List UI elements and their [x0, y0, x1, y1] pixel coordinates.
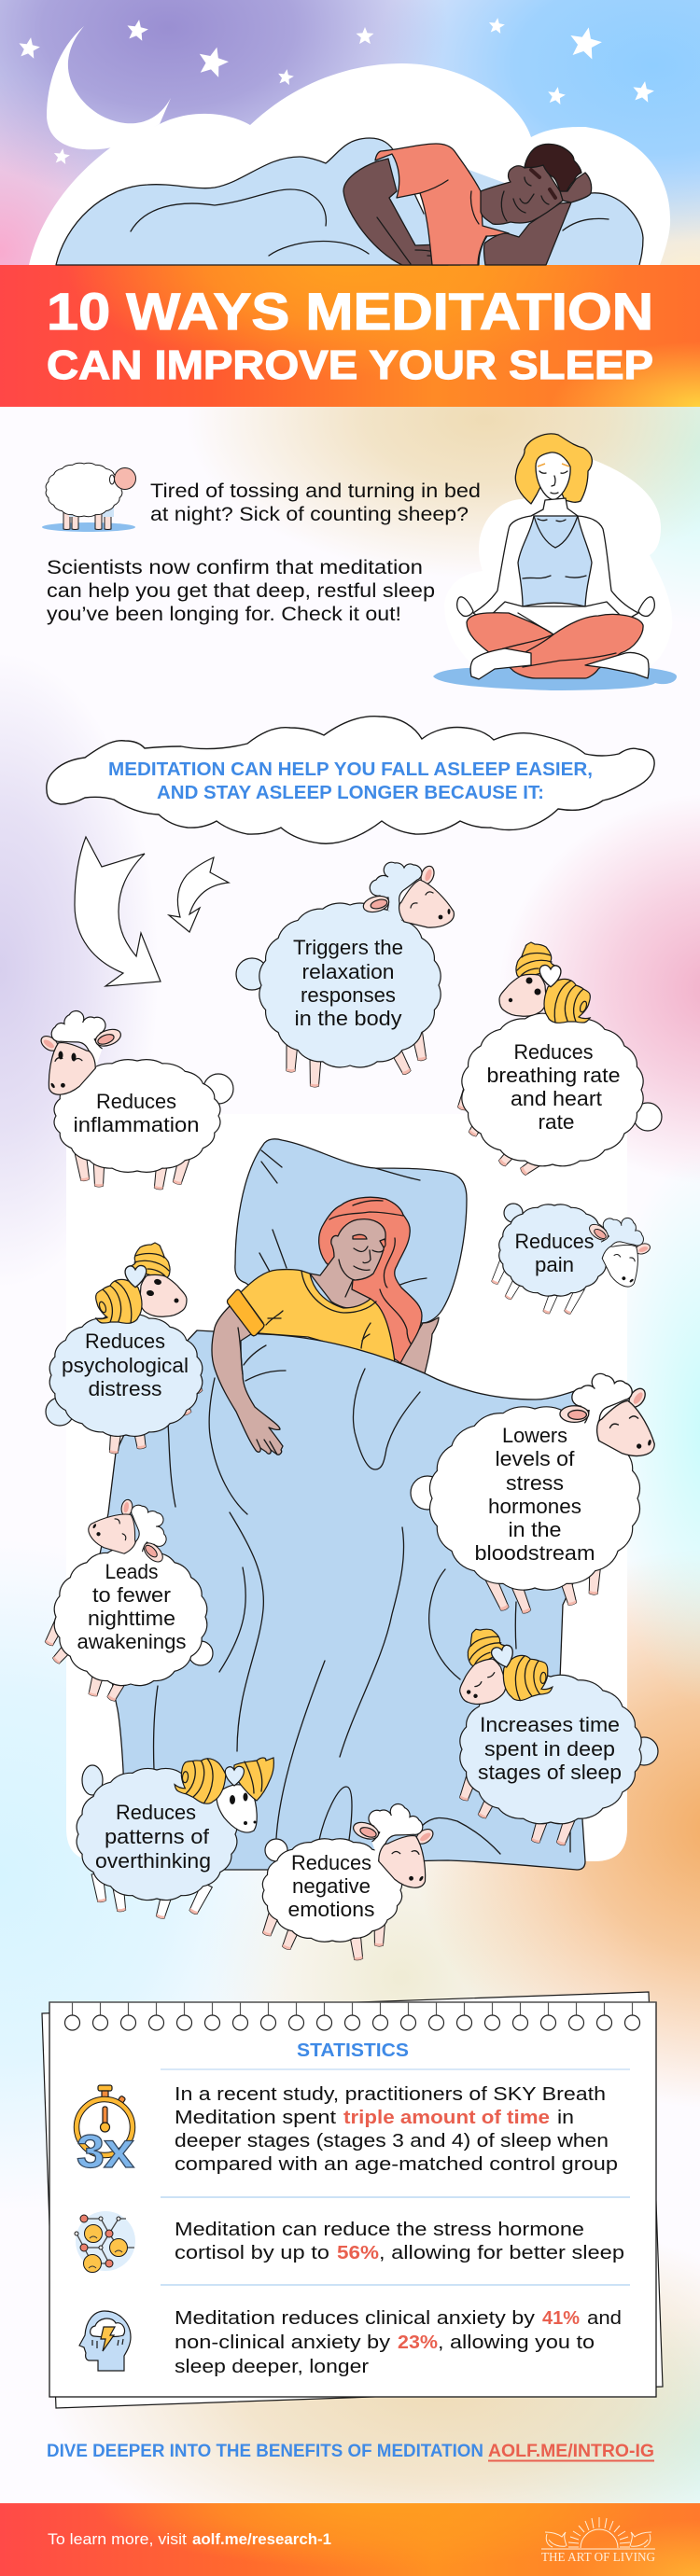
stat text: cortisol: , allowing for better sleep: [379, 2243, 624, 2263]
title banner background: [0, 265, 700, 407]
intro text: scientists confirm: can help you get that deep, restful sleep: [47, 580, 435, 602]
label: patterns of: [105, 1825, 210, 1848]
statistics heading: STATISTICS: [297, 2040, 409, 2061]
sleeping man illustration: [56, 138, 643, 265]
label: [474, 1424, 595, 1565]
stat text: anxiety: sleep deeper, longer: [175, 2357, 369, 2377]
footer text: To learn more, visit: [48, 2530, 187, 2548]
intro text: tired of tossing: [150, 480, 481, 525]
label: stress: [506, 1471, 564, 1495]
stat text: cortisol: Meditation can reduce the stress hormone: [175, 2220, 584, 2240]
stat text: triple amount of time: [175, 2084, 618, 2175]
stat text: triple amount of time: Meditation spent: [175, 2108, 337, 2128]
stat text: triple amount of time: in: [557, 2108, 574, 2128]
cloud heading panel: [47, 717, 654, 843]
stat text: triple amount of time: triple amount of time: [343, 2108, 550, 2128]
icon: stress hormone network: [75, 2211, 135, 2273]
header white cloud: [29, 63, 670, 265]
label: hormones: [488, 1495, 581, 1518]
stat text: triple amount of time: deeper stages (stages 3 and 4) of sleep when: [175, 2131, 609, 2151]
label: bloodstream: [474, 1541, 595, 1565]
label: overthinking: [95, 1849, 211, 1873]
hair: [319, 1197, 422, 1363]
logo: the art of living: THE ART OF LIVING: [541, 2551, 655, 2565]
far arm: [400, 1317, 439, 1373]
curled horns: [172, 1749, 273, 1808]
label: awakenings: [77, 1630, 187, 1653]
stat text: cortisol: cortisol by up to: [175, 2243, 329, 2263]
label: Reduces: [513, 1040, 594, 1064]
blanket wrinkles: [153, 1345, 570, 1854]
footer bar background: [0, 2503, 700, 2576]
label: emotions: [287, 1898, 375, 1921]
label: Increases time: [480, 1713, 620, 1736]
man's neck, raised arm and face: [483, 173, 592, 265]
label: and heart: [511, 1087, 602, 1110]
yellow shirt: [241, 1270, 395, 1362]
man's orange shirt: [375, 144, 509, 265]
blanket: [56, 138, 448, 265]
intro text: tired of tossing: at night? Sick of counting sheep?: [150, 504, 469, 525]
sheep: reduces pain: [490, 1202, 665, 1316]
label: stages of sleep: [478, 1761, 622, 1784]
spiral binding: [49, 2002, 656, 2030]
hair: [515, 434, 592, 504]
white bed panel: [66, 1114, 627, 1861]
man's lower arm: [343, 159, 460, 265]
label: breathing rate: [487, 1064, 620, 1087]
label: pain: [535, 1253, 574, 1276]
label: Lowers: [502, 1424, 567, 1447]
face: [536, 453, 570, 500]
label: Leads: [105, 1560, 159, 1583]
title: 10 WAYS MEDITATION: [47, 282, 653, 341]
label: spent in deep: [484, 1737, 615, 1761]
intro text: scientists confirm: you’ve been longing for. Check it out!: [47, 604, 401, 625]
call to action link line: AOLF.ME/INTRO-IG: [488, 2441, 654, 2461]
label: [62, 1330, 189, 1400]
arrow: small curved: [169, 857, 229, 932]
label: [487, 1040, 620, 1134]
small sheep icon: [42, 463, 136, 532]
sheep: triggers the relaxation responses: [236, 862, 454, 1087]
footer text: aolf.me/research-1: [192, 2530, 331, 2548]
label: [515, 1230, 594, 1276]
sheep: lowers levels of stress hormones: [411, 1366, 669, 1614]
label: distress: [88, 1377, 162, 1400]
label: levels of: [495, 1447, 575, 1470]
label: Reduces: [515, 1230, 594, 1253]
title: [47, 282, 653, 388]
front page: [49, 2002, 656, 2397]
arrow: large curved: [75, 837, 161, 986]
arms and torso: [473, 498, 638, 620]
stat text: anxiety: [175, 2308, 622, 2377]
label: in the body: [295, 1007, 401, 1030]
pillow: [411, 159, 643, 265]
intro text: scientists confirm: [47, 557, 435, 625]
stat text: anxiety: , allowing you to: [438, 2332, 595, 2353]
sheep: reduces breathing rate and heart rate: [456, 942, 662, 1177]
label: relaxation: [302, 960, 394, 983]
stat text: anxiety: Meditation reduces clinical anxiety by: [175, 2308, 535, 2329]
stat text: triple amount of time: In a recent study, practitioners of SKY Breath: [175, 2084, 606, 2105]
cloud heading panel: MEDITATION CAN HELP YOU FALL ASLEEP EASIER,: [108, 759, 593, 780]
label: Reduces: [116, 1801, 196, 1824]
near arm: [212, 1306, 283, 1455]
cloud heading panel: AND STAY ASLEEP LONGER BECAUSE IT:: [157, 783, 544, 803]
title: CAN IMPROVE YOUR SLEEP: [47, 342, 653, 388]
meditating woman illustration: [433, 434, 677, 690]
back page: [42, 1992, 663, 2408]
man's hair: [525, 144, 581, 191]
statistics notebook card: [42, 1992, 663, 2408]
face and neck: [310, 1219, 385, 1308]
sheep: reduces psychological distress: [46, 1243, 204, 1454]
stars: [17, 17, 655, 164]
label: rate: [538, 1110, 575, 1134]
intro text: scientists confirm: Scientists now confirm that meditation: [47, 557, 423, 578]
white blob behind woman: [444, 460, 672, 676]
label: Reduces: [291, 1851, 371, 1874]
stat text: anxiety: non-clinical anxiety by: [175, 2332, 390, 2353]
sheep: leads to fewer nighttime awakenings: [44, 1486, 213, 1703]
icon: stopwatch 3x: 3: [77, 2125, 105, 2178]
footer text: [48, 2530, 331, 2548]
label: psychological: [62, 1354, 189, 1377]
stat text: triple amount of time: compared with an age-matched control group: [175, 2154, 618, 2175]
stat text: cortisol: 56%: [337, 2243, 379, 2263]
stat text: anxiety: and: [587, 2308, 622, 2329]
feet: [470, 648, 649, 679]
logo: the art of living: [541, 2517, 655, 2565]
night sky background: [0, 0, 700, 265]
call to action link line: DIVE DEEPER INTO THE BENEFITS OF MEDITATION: [47, 2441, 483, 2461]
label: in the: [508, 1518, 562, 1541]
icon: stopwatch 3x: [77, 2085, 134, 2179]
sheep: reduces negative emotions: [261, 1789, 454, 1961]
label: [287, 1851, 375, 1921]
sheep: reduces inflammation: [21, 996, 233, 1191]
sleeping woman in bed illustration: [93, 1139, 616, 1870]
mat shadow: [433, 667, 677, 690]
label: [293, 936, 403, 1030]
label: [478, 1713, 622, 1784]
icon: stopwatch 3x: x: [104, 2123, 134, 2179]
icon: head with storm cloud: [79, 2311, 131, 2371]
sleeve cuff: [228, 1289, 264, 1336]
label: negative: [292, 1874, 371, 1898]
pillow: [235, 1139, 467, 1323]
label: Triggers the: [293, 936, 403, 959]
label: nighttime: [88, 1607, 175, 1630]
label: inflammation: [73, 1113, 200, 1136]
label: responses: [301, 983, 396, 1007]
stat text: anxiety: 23%: [398, 2332, 438, 2353]
sheep: increases time in deep sleep: [445, 1614, 658, 1846]
crossed legs: [467, 613, 643, 678]
label: [73, 1090, 200, 1136]
crescent moon: [47, 26, 171, 149]
label: to fewer: [92, 1583, 171, 1607]
label: Reduces: [85, 1330, 165, 1353]
stat text: anxiety: 41%: [542, 2308, 580, 2329]
stat text: cortisol: [175, 2220, 624, 2263]
label: [77, 1560, 187, 1653]
intro text: tired of tossing: Tired of tossing and turning in bed: [150, 480, 481, 502]
sheep: reduces patterns of overthinking: [77, 1749, 273, 1919]
label: Reduces: [96, 1090, 176, 1113]
blanket: [93, 1330, 616, 1870]
label: [95, 1801, 211, 1873]
